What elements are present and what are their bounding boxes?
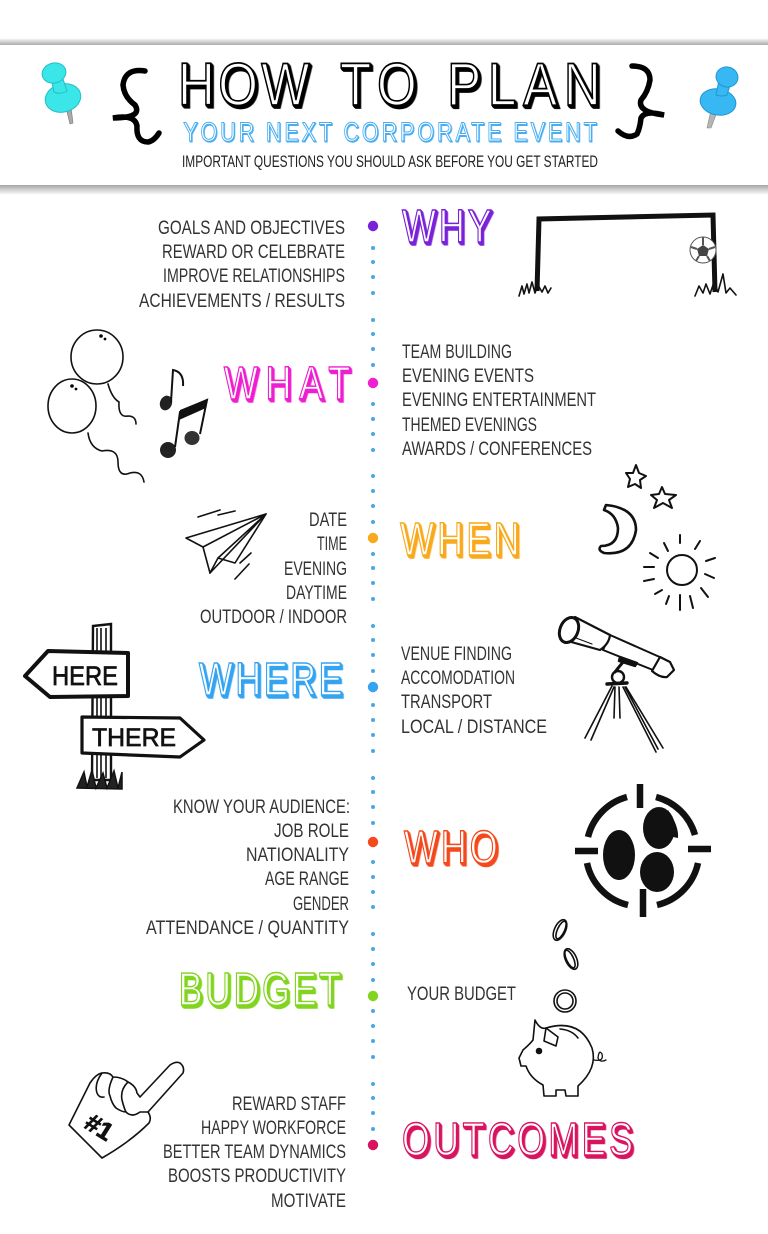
where list: TRANSPORT [401, 692, 492, 713]
icon: balloons [48, 330, 144, 482]
title: PLAN [447, 51, 608, 118]
budget heading: BUDGET [179, 964, 341, 1015]
icon: soccer goal [519, 215, 736, 296]
icon: right pushpin [698, 64, 740, 128]
icon: left pushpin [40, 60, 84, 124]
why heading: WHY [402, 201, 492, 252]
when list: DATE [309, 510, 347, 531]
who list: GENDER [293, 894, 349, 915]
when list: TIME [317, 534, 347, 555]
who heading: WHO [404, 822, 498, 873]
icon: signpost: HERE [52, 661, 118, 691]
icon: telescope [556, 615, 674, 752]
budget text: YOUR BUDGET [407, 984, 516, 1005]
where list [401, 644, 547, 738]
who list: KNOW YOUR AUDIENCE: [173, 797, 350, 818]
what heading: WHAT [224, 358, 350, 409]
when list: OUTDOOR / INDOOR [200, 607, 347, 628]
section: budget [179, 918, 606, 1096]
when list: DAYTIME [286, 583, 347, 604]
tagline: IMPORTANT QUESTIONS YOU SHOULD ASK BEFORE YOU GET STARTED [182, 153, 598, 171]
icon: right brace [618, 66, 664, 136]
icon: audience target [575, 784, 711, 917]
outcomes list: MOTIVATE [271, 1191, 346, 1212]
where list: ACCOMODATION [401, 668, 515, 689]
outcomes heading: OUTCOMES [402, 1114, 633, 1165]
icon: paper airplane [186, 510, 266, 579]
subtitle: YOUR NEXT CORPORATE EVENT [183, 118, 597, 148]
where list: LOCAL / DISTANCE [401, 717, 547, 738]
what list: TEAM BUILDING [402, 342, 512, 363]
outcomes list: REWARD STAFF [232, 1094, 346, 1115]
header banner [0, 38, 768, 195]
icon: music notes [158, 370, 207, 458]
where heading: WHERE [199, 654, 342, 705]
what list: EVENING EVENTS [402, 366, 534, 387]
section: outcomes [69, 1062, 633, 1212]
when list: EVENING [284, 559, 347, 580]
who list [146, 797, 350, 939]
who list: JOB ROLE [274, 821, 349, 842]
section: when [186, 465, 715, 628]
outcomes list: BETTER TEAM DYNAMICS [163, 1142, 346, 1163]
section: what [48, 330, 596, 482]
dotted centre timeline [368, 221, 378, 1150]
icon: signpost: THERE [92, 724, 176, 752]
icon: signpost [25, 624, 204, 789]
who list: ATTENDANCE / QUANTITY [146, 918, 349, 939]
who list: NATIONALITY [246, 845, 349, 866]
section: who [146, 784, 711, 939]
outcomes list: HAPPY WORKFORCE [201, 1118, 346, 1139]
what list: THEMED EVENINGS [402, 415, 537, 436]
why list [139, 218, 345, 312]
outcomes list: BOOSTS PRODUCTIVITY [168, 1166, 346, 1187]
who list: AGE RANGE [265, 869, 349, 890]
what list [402, 342, 596, 460]
why list: ACHIEVEMENTS / RESULTS [139, 291, 345, 312]
title: HOW [178, 51, 313, 118]
why list: IMPROVE RELATIONSHIPS [163, 266, 345, 287]
outcomes list [163, 1094, 346, 1212]
icon: foam finger: #1 [80, 1108, 118, 1147]
when list [200, 510, 347, 628]
when heading: WHEN [400, 514, 519, 565]
section: where [25, 615, 674, 789]
icon: piggy bank [519, 1020, 606, 1096]
why list: REWARD OR CELEBRATE [162, 242, 345, 263]
icon: foam finger [69, 1062, 184, 1158]
section: why [139, 201, 736, 312]
icon: left brace [113, 71, 159, 142]
what list: EVENING ENTERTAINMENT [402, 390, 596, 411]
what list: AWARDS / CONFERENCES [402, 439, 592, 460]
where list: VENUE FINDING [401, 644, 512, 665]
why list: GOALS AND OBJECTIVES [158, 218, 345, 239]
icon: coins [550, 918, 581, 1012]
title: TO [340, 51, 423, 118]
icon: stars moon and sun [600, 465, 715, 610]
